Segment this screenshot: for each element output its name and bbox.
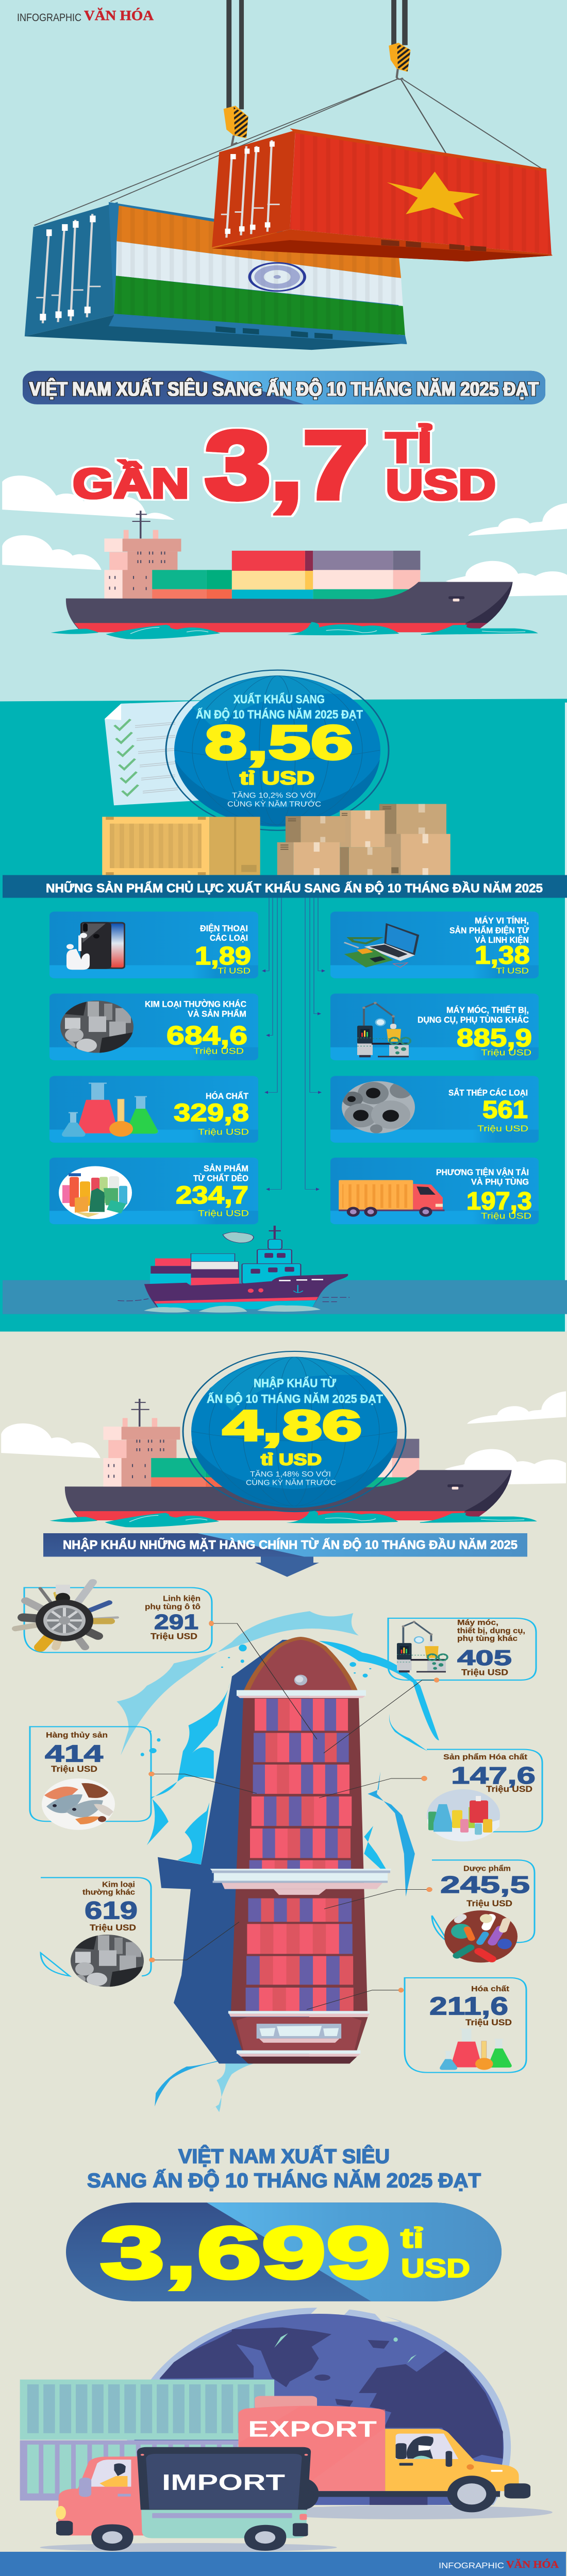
card: chemicals: HÓA CHẤT <box>206 1091 249 1101</box>
callout: chemical products: 147,6 <box>451 1762 536 1789</box>
card: machinery: Triệu USD <box>481 1048 531 1058</box>
card: chemicals: Triệu USD <box>198 1128 249 1137</box>
card: vehicles: 197,3 <box>466 1188 532 1215</box>
pill: trade surplus value <box>66 2202 502 2301</box>
globe: import value <box>183 1351 406 1512</box>
callout: seafood: 414 <box>45 1740 103 1767</box>
card: chemicals: 329,8 <box>174 1099 249 1127</box>
photo: detergent bottles <box>427 1789 500 1841</box>
logo: Infographic Văn Hóa <box>17 7 154 24</box>
logo: Infographic Văn Hóa: INFOGRAPHIC <box>17 11 81 24</box>
leader line <box>324 1890 429 1909</box>
card: base metals: 684,6 <box>166 1021 247 1050</box>
callout: auto parts: phụ tùng ô tô <box>145 1602 201 1611</box>
pill: trade surplus value: 3,699 <box>100 2212 391 2294</box>
headline: gần 3,7 tỉ USD <box>73 411 496 519</box>
footer bar with logo: INFOGRAPHIC <box>439 2562 504 2570</box>
card: iron and steel <box>330 1076 539 1143</box>
icon: smartphone and earbuds <box>66 922 125 970</box>
card: computers and electronics: SẢN PHẨM ĐIỆN TỬ <box>449 925 529 935</box>
card: computers and electronics: MÁY VI TÍNH, <box>475 916 529 926</box>
icon: delivery truck <box>339 1180 444 1217</box>
background: beige import section <box>0 1332 567 2576</box>
callout: machinery: Triệu USD <box>461 1668 508 1677</box>
crane hook right <box>389 43 410 79</box>
label: IMPORT: IMPORT <box>162 2470 285 2495</box>
heading: trade surplus: VIỆT NAM XUẤT SIÊU <box>178 2145 390 2167</box>
callout: base metals: Kim loại <box>102 1879 135 1889</box>
illustration: yellow container crate <box>102 817 260 875</box>
icon: chemistry flasks <box>62 1082 158 1137</box>
icon: steel wire coils <box>342 1081 415 1133</box>
leader line <box>324 1680 437 1753</box>
card: plastic products: Triệu USD <box>198 1209 249 1218</box>
callout: pharmaceuticals: Dược phẩm <box>463 1863 511 1873</box>
section banner: main export products <box>3 875 567 898</box>
callout: seafood: Hàng thủy sản <box>46 1730 108 1739</box>
hull sides <box>231 1698 368 2011</box>
card: iron and steel: Triệu USD <box>477 1124 528 1133</box>
card: phones <box>49 911 258 978</box>
headline: gần 3,7 tỉ USD: USD <box>386 461 496 509</box>
leader line <box>152 1774 257 1793</box>
globe: export value: 8,56 <box>205 716 353 770</box>
icon: tyre with car parts <box>15 1582 118 1647</box>
card: computers and electronics: 1,38 <box>475 941 530 969</box>
callout: base metals: Triệu USD <box>90 1923 136 1933</box>
section banner with arrow: main import items <box>43 1533 527 1577</box>
callout: pharmaceuticals <box>324 1860 535 1964</box>
import truck <box>56 2447 311 2551</box>
callout: machinery: Máy móc, <box>457 1618 498 1626</box>
Ashoka chakra <box>249 263 305 291</box>
globe: import value: tỉ USD <box>261 1450 322 1469</box>
card: computers and electronics: Tỉ USD <box>496 967 529 976</box>
container: Vietnam flag <box>212 128 553 262</box>
callout: auto parts: Linh kiện <box>163 1594 201 1603</box>
callout: chemicals <box>307 1978 526 2073</box>
background: teal export section <box>0 699 567 1332</box>
crane hook left <box>224 106 248 145</box>
water drips below ship <box>155 2061 256 2112</box>
ship top view: hull shadow <box>158 1640 309 2063</box>
leader line <box>319 1778 424 1798</box>
globe: import value: ẤN ĐỘ 10 THÁNG NĂM 2025 ĐẠT <box>207 1392 383 1405</box>
footer bar with logo <box>0 2552 566 2576</box>
card: vehicles <box>330 1158 539 1224</box>
container: India flag <box>25 202 407 350</box>
callout: seafood: Triệu USD <box>51 1765 97 1774</box>
clouds: import section <box>1 1392 566 1484</box>
icon: robot machine <box>397 1621 447 1672</box>
card: base metals <box>49 994 258 1060</box>
callout: pharmaceuticals: Triệu USD <box>466 1899 512 1908</box>
icon: metal bars <box>60 1001 134 1053</box>
headline: gần 3,7 tỉ USD: TỈ <box>386 423 432 471</box>
leader line <box>307 1990 401 2009</box>
icon: plastic bottles <box>59 1166 132 1219</box>
card: machinery <box>330 994 539 1060</box>
card: computers and electronics: VÀ LINH KIỆN <box>475 935 529 945</box>
callout: machinery: 405 <box>457 1646 512 1670</box>
callout: chemicals: 211,6 <box>429 1992 508 2020</box>
water splash around ship <box>116 1611 439 1896</box>
callout: chemical products <box>319 1750 542 1841</box>
globe: export value: ẤN ĐỘ 10 THÁNG NĂM 2025 ĐẠT <box>196 707 363 721</box>
card: machinery: 885,9 <box>457 1023 532 1052</box>
ship top view: deck and containers <box>210 1637 391 2064</box>
callout: chemicals: Triệu USD <box>465 2018 512 2027</box>
card: vehicles: Triệu USD <box>481 1211 531 1221</box>
globe: export value: CÙNG KỲ NĂM TRƯỚC <box>227 799 321 808</box>
callout: chemical products: Triệu USD <box>486 1785 532 1794</box>
card: plastic products <box>49 1158 258 1224</box>
photo: pills <box>444 1910 518 1964</box>
illustration: container ship (import) <box>49 1399 537 1528</box>
callout: base metals: thường khác <box>82 1888 135 1896</box>
headline: gần 3,7 tỉ USD: 3,7 <box>205 411 368 519</box>
card: iron and steel: SẮT THÉP CÁC LOẠI <box>448 1088 528 1098</box>
card: computers and electronics <box>330 911 539 978</box>
card: vehicles: VÀ PHỤ TÙNG <box>471 1177 529 1187</box>
callout: auto parts: Triệu USD <box>151 1632 197 1641</box>
card: plastic products: TỪ CHẤT DẺO <box>193 1173 248 1183</box>
callout: auto parts <box>15 1582 317 1739</box>
card: base metals: VÀ SẢN PHẨM <box>188 1009 246 1019</box>
title banner <box>23 371 545 404</box>
card: phones: ĐIỆN THOẠI <box>200 923 248 934</box>
leader line <box>211 1623 317 1739</box>
export truck <box>239 2396 530 2512</box>
card: phones: 1,89 <box>195 941 251 970</box>
callout: chemicals: Hóa chất <box>471 1984 509 1993</box>
crane cables <box>226 0 408 109</box>
bow <box>243 1637 358 1691</box>
callout: auto parts: 291 <box>154 1611 198 1634</box>
globe: import value: TĂNG 1,48% SO VỚI <box>250 1469 331 1478</box>
globe: export value: TĂNG 10,2% SO VỚI <box>232 791 316 800</box>
card: iron and steel: 561 <box>482 1096 528 1124</box>
callout: base metals <box>41 1877 239 1987</box>
icon: chemistry flasks <box>440 2028 512 2070</box>
logo: Infographic Văn Hóa: VĂN HÓA <box>84 7 154 24</box>
icon: industrial robot <box>357 1002 410 1057</box>
heading: trade surplus <box>87 2145 481 2192</box>
clouds <box>2 476 567 596</box>
card: plastic products: 234,7 <box>176 1182 248 1209</box>
photo: metal bars <box>71 1935 144 1987</box>
yellow star <box>387 172 480 219</box>
globe: import value: 4,86 <box>223 1401 362 1450</box>
illustration: container ship <box>51 511 538 639</box>
label: EXPORT: EXPORT <box>248 2417 377 2442</box>
globe: import value: CÙNG KỲ NĂM TRƯỚC <box>246 1478 336 1487</box>
card: base metals: KIM LOẠI THƯỜNG KHÁC <box>145 999 246 1009</box>
photo: fish and shrimp <box>42 1778 115 1830</box>
globe: export value <box>166 670 389 831</box>
connector lines with arrows <box>262 898 325 1191</box>
leader line <box>152 1922 239 1960</box>
illustration: globe, containers and trucks <box>20 2306 553 2552</box>
globe: export value: XUẤT KHẨU SANG <box>234 692 325 706</box>
checklist document <box>105 701 206 805</box>
illustration: cartoon cargo ship <box>118 1226 349 1313</box>
card: phones: Tỉ USD <box>218 967 251 976</box>
stacked containers <box>20 2380 274 2440</box>
background: sky section <box>0 0 567 708</box>
sling ropes <box>35 79 543 225</box>
world globe <box>127 2306 511 2505</box>
illustration: cargo containers with flags hanging from cranes <box>25 0 553 350</box>
callout: pharmaceuticals: 245,5 <box>440 1871 530 1898</box>
callout: base metals: 619 <box>85 1897 138 1924</box>
right edge strip teal section <box>565 703 567 1332</box>
sea band behind cartoon ship <box>3 1280 567 1314</box>
ground shadows <box>266 2505 553 2519</box>
headline: gần 3,7 tỉ USD: GẦN <box>73 460 189 507</box>
callout: chemical products: Sản phẩm Hóa chất <box>443 1752 527 1761</box>
card: plastic products: SẢN PHẨM <box>204 1164 248 1174</box>
card: phones: CÁC LOẠI <box>210 933 248 943</box>
globe: export value: tỉ USD <box>240 768 314 789</box>
card: machinery: MÁY MÓC, THIẾT BỊ, <box>446 1005 529 1015</box>
card: base metals: Triệu USD <box>193 1047 244 1056</box>
callout: seafood <box>30 1726 257 1830</box>
import truck shadow <box>40 2543 337 2552</box>
callout: machinery <box>324 1618 536 1753</box>
card: chemicals <box>49 1076 258 1143</box>
pill: trade surplus value: tỉ <box>401 2223 424 2253</box>
callout: machinery: thiết bị, dụng cụ, <box>457 1626 525 1635</box>
stern superstructure <box>228 1988 370 2064</box>
callout: machinery: phụ tùng khác <box>457 1634 518 1642</box>
pill: trade surplus value: USD <box>401 2253 470 2283</box>
globe: import value: NHẬP KHẨU TỪ <box>254 1377 337 1389</box>
icon: laptop and circuit board <box>344 923 419 968</box>
illustration: cardboard boxes <box>277 804 451 875</box>
container rows <box>210 1690 391 1985</box>
